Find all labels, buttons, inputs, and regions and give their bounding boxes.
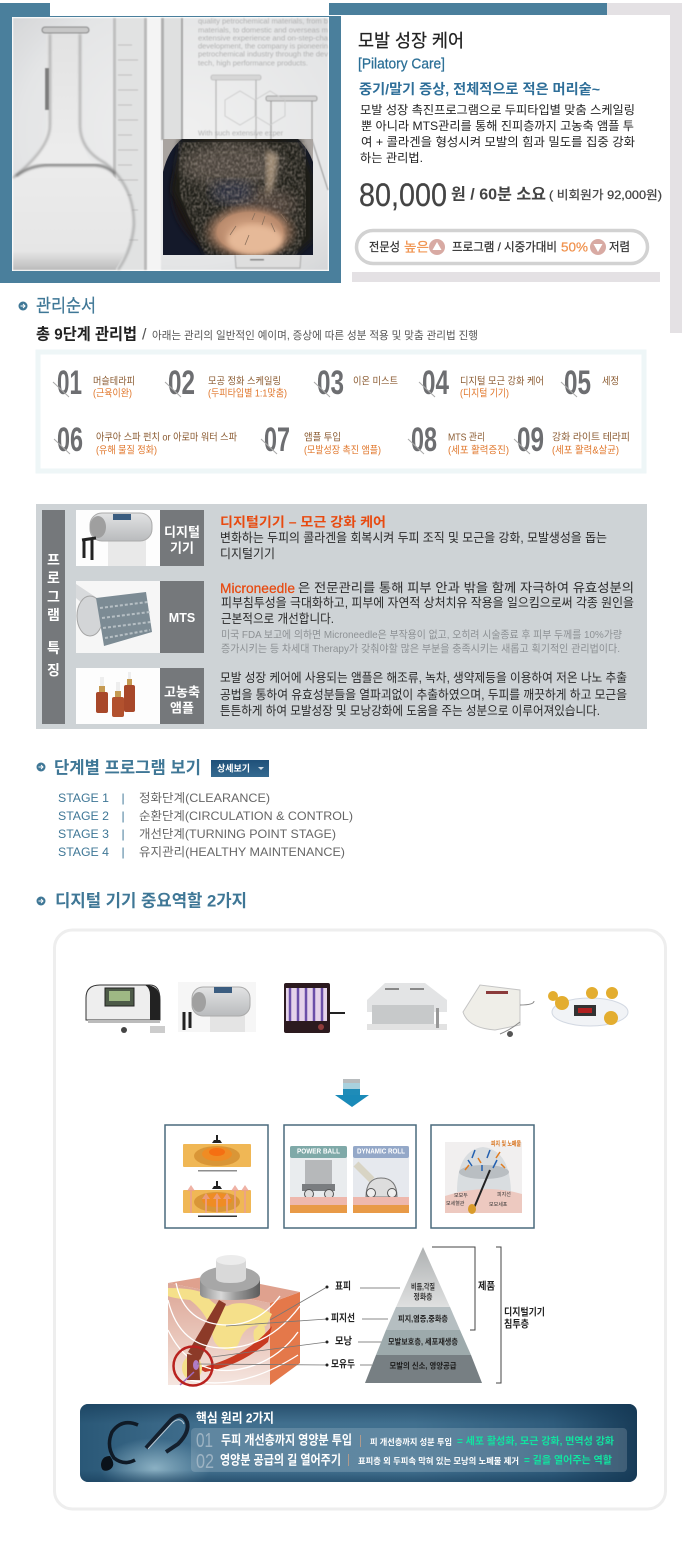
panel: product summary: [Pilatory Care]: [358, 56, 445, 72]
text: digital device description: [220, 514, 607, 561]
text block: stage list: STAGE 4: [58, 845, 109, 859]
diagram: sebum extraction: 모세혈관: [446, 1200, 465, 1207]
callout: expertise and price pill: 높은: [404, 240, 429, 254]
heading: program by stage: 단계별 프로그램 보기: [54, 758, 201, 778]
label: MTS: [160, 581, 204, 653]
subheading: 9 steps: [36, 326, 478, 344]
step 02: (두피타입별 1:1맞춤): [208, 386, 287, 400]
step 07: [261, 421, 381, 459]
step 06: (유해 물질 정화): [96, 444, 157, 456]
panel: nine treatment steps: [38, 352, 644, 471]
step 06: 06: [57, 421, 83, 459]
sidebar label: 특: [47, 640, 60, 656]
step 08: MTS 관리: [448, 432, 485, 444]
step 06: [54, 421, 237, 459]
text: MTS description: 미국 FDA 보고에 의하면 Microneedle은 부작용이 없고, 오히려 시술종료 후 피부 두께를 10%가량: [221, 628, 622, 641]
text block: stage list: |: [121, 809, 125, 823]
text: ampoule description: 공법을 통하여 유효성분들을 열파괴없이 추출하였으며, 두피를 깨끗하게 하고 모근을: [220, 688, 627, 702]
icon: device 5: [463, 985, 534, 1037]
step 01: (근육이완): [93, 388, 132, 400]
step 03: [314, 364, 398, 402]
step 03: 03: [317, 364, 344, 402]
button: details: 상세보기: [217, 762, 250, 774]
label: concentrated ampoule: 앰플: [170, 700, 194, 716]
diagram: sebum extraction: [431, 1125, 534, 1228]
label: digital device: 기기: [170, 540, 194, 556]
chart: penetration pyramid: 모발의 신소, 영양공급: [390, 1360, 457, 1370]
bracket: digital device range: [496, 1247, 545, 1383]
label: concentrated ampoule: [160, 668, 204, 724]
step 01: [53, 364, 135, 402]
subheading: 9 steps: 총 9단계 관리법: [36, 326, 137, 344]
icon: MTS roller photo: [76, 581, 160, 653]
header blue background: [0, 3, 682, 333]
subheading: 9 steps: /: [142, 326, 147, 344]
chart: penetration pyramid: [365, 1247, 482, 1383]
callout: expertise and price pill: 프로그램 / 시중가대비: [452, 240, 557, 254]
sidebar label: [42, 510, 65, 724]
text block: stage list: STAGE 2: [58, 809, 109, 823]
text block: stage list: STAGE 3: [58, 827, 109, 841]
heading: 관리순서: 관리순서: [36, 296, 96, 316]
callout: expertise and price pill: 저렴: [609, 240, 630, 254]
callout: two core principles: 02: [196, 1451, 214, 1473]
arrow: down: [335, 1079, 369, 1107]
callout: two core principles: 01: [196, 1430, 213, 1452]
diagram: sebum extraction: 모모세포: [489, 1201, 508, 1208]
bracket: digital device range: 디지털기기: [504, 1306, 545, 1318]
diagram: sebum extraction: 모모두: [454, 1193, 468, 1199]
callout: two core principles: 핵심 원리 2가지: [196, 1410, 274, 1426]
step 04: 디지털 모근 강화 케어: [460, 376, 544, 388]
text: MTS description: 은 전문관리를 통해 피부 안과 밖을 함께 자극하여 유효성분의: [298, 581, 634, 595]
icon: device 4: [367, 983, 447, 1030]
labels: scalp layers: 표피: [335, 1280, 351, 1292]
text: MTS description: 근본적으로 개선합니다.: [221, 612, 334, 626]
photo: laboratory glassware: petrochemical industry through the dev: [198, 52, 329, 58]
icon: device 1: [86, 985, 165, 1033]
panel: product summary: 모발 성장 촉진프로그램으로 두피타입별 맞춤 스케일링: [360, 103, 635, 117]
step 08: 08: [411, 421, 437, 459]
callout: expertise and price pill: [356, 230, 648, 264]
sidebar label: 징: [47, 662, 60, 678]
text block: stage list: |: [121, 827, 125, 841]
step 07: 07: [264, 421, 290, 459]
step 09: (세포 활력&살균): [552, 444, 619, 456]
text block: stage list: 개선단계(TURNING POINT STAGE): [139, 827, 336, 841]
icon: device 6: [548, 987, 628, 1026]
panel: program features: [36, 504, 647, 729]
step 04: [419, 364, 544, 402]
step 07: (모발성장 촉진 앰플): [304, 444, 381, 456]
icon: hook and lock: [101, 1415, 188, 1471]
callout: two core principles: 영양분 공급의 길 열어주기: [220, 1452, 341, 1468]
step 07: 앰플 투입: [304, 430, 341, 444]
step 02: [165, 364, 287, 402]
labels: scalp layers: 피지선: [331, 1312, 355, 1324]
step 09: 09: [517, 421, 544, 459]
sidebar label: 그: [47, 589, 60, 605]
text block: stage list: 순환단계(CIRCULATION & CONTROL): [139, 809, 353, 823]
sidebar label: 램: [47, 607, 60, 623]
step 01: 01: [57, 364, 82, 402]
callout: two core principles: 표피층 외 두피속 막혀 있는 모낭의 노폐물 제거: [358, 1456, 519, 1466]
button: details: [211, 760, 269, 777]
text: MTS description: 증가시키는 등 차세대 Therapy가 갖춰야할 많은 부분을 충족시키는 새롭고 획기적인 관리법이다.: [221, 642, 620, 655]
chart: penetration pyramid: 모발보호층, 세포재생층: [388, 1336, 459, 1346]
callout: two core principles: 피 개선층까지 성분 투입: [370, 1437, 452, 1447]
photo: thinning crown of hair: [163, 126, 313, 262]
panel: product summary: 하는 관리법.: [360, 151, 423, 165]
text: MTS description: Microneedle: [220, 580, 295, 596]
callout: two core principles: = 길을 열어주는 역할: [524, 1454, 612, 1466]
sidebar label: 프: [47, 552, 60, 568]
bracket: digital device range: 침투층: [504, 1318, 529, 1330]
text: MTS description: 피부침투성을 극대화하고, 피부에 자연적 상처치유 작용을 일으킴으로써 각종 원인을: [221, 596, 634, 610]
text: digital device description: 디지털기기 – 모근 강화 케어: [220, 514, 386, 530]
photo: laboratory glassware: development, the company is pioneerin: [198, 44, 328, 50]
step 06: 아쿠아 스파 펀치 or 아로마 워터 스파: [96, 430, 237, 444]
icon: digital device photo: [76, 510, 160, 566]
text block: stage list: 정화단계(CLEARANCE): [139, 791, 270, 805]
chart: penetration pyramid: 정화층: [414, 1292, 433, 1302]
labels: scalp layers: 모낭: [335, 1334, 352, 1348]
label: digital device: 디지털: [164, 524, 200, 540]
diagram: power ball and dynamic roll: POWER BALL: [297, 1148, 341, 1156]
diagram: scalp cross-section: [168, 1255, 327, 1386]
text block: stage list: [58, 791, 353, 859]
panel: product summary: ( 비회원가 92,000원): [549, 188, 662, 202]
callout: two core principles: [80, 1404, 637, 1482]
callout: expertise and price pill: 전문성: [369, 240, 400, 254]
callout: two core principles: 두피 개선층까지 영양분 투입: [221, 1432, 352, 1448]
chart: penetration pyramid: 피지,염증,중화층: [398, 1314, 449, 1324]
step 04: (디지털 기기): [460, 388, 509, 400]
panel: digital device roles: [54, 930, 666, 1509]
diagram: sebum extraction: 피지 및 노폐물: [491, 1138, 521, 1148]
photo: laboratory glassware: tech, high performance products.: [198, 60, 308, 68]
callout: expertise and price pill: 50%: [561, 240, 588, 254]
label: digital device: [160, 510, 204, 566]
step 09: 강화 라이트 테라피: [552, 432, 630, 444]
icon: ampoule bottles photo: [76, 668, 160, 724]
diagram: power ball and dynamic roll: DYNAMIC ROLL: [357, 1148, 406, 1156]
bracket: product range: [432, 1247, 495, 1330]
diagram: heat layers: [165, 1125, 268, 1228]
label: MTS: MTS: [169, 611, 195, 625]
icon: device 3 light panel: [284, 983, 345, 1033]
title: 모발 성장 케어: [358, 31, 464, 51]
icon: device 2: [178, 982, 256, 1032]
text: ampoule description: [220, 670, 627, 718]
panel: product summary: 여 + 콜라겐을 형성시켜 모발의 힘과 밀도를 집중 강화: [361, 135, 635, 149]
panel: product summary: [358, 31, 662, 213]
photo: laboratory glassware: [12, 17, 329, 271]
diagram: power ball and dynamic roll: [284, 1125, 416, 1228]
text: ampoule description: 모발 성장 케어에 사용되는 앰플은 해조류, 녹차, 생약제등을 이용하여 저온 나노 추출: [220, 670, 627, 685]
step 02: 모공 정화 스케일링: [208, 376, 281, 388]
step 09: [514, 421, 630, 459]
step 01: 머슬테라피: [93, 376, 135, 388]
photo: laboratory glassware: quality petrochemical materials, from b: [198, 18, 328, 26]
panel: product summary: 80,000: [359, 177, 447, 213]
text block: stage list: |: [121, 791, 125, 805]
text block: stage list: STAGE 1: [58, 791, 109, 805]
panel: product summary: 중기/말기 증상, 전체적으로 적은 머리숱~: [359, 81, 600, 97]
heading: two roles of digital devices: 디지털 기기 중요역할 2가지: [55, 892, 247, 910]
step 08: (세포 활력증진): [448, 444, 509, 456]
text: digital device description: 디지털기기: [220, 547, 275, 561]
text: digital device description: 변화하는 두피의 콜라겐을 회복시켜 두피 조직 및 모근을 강화, 모발생성을 돕는: [220, 531, 607, 545]
sidebar label: 로: [47, 570, 60, 586]
step 04: 04: [422, 364, 449, 402]
subheading: 9 steps: 아래는 관리의 일반적인 예이며, 증상에 따른 성분 적용 및 맞춤 관리법 진행: [152, 328, 478, 342]
text block: stage list: 유지관리(HEALTHY MAINTENANCE): [139, 845, 345, 859]
text block: stage list: |: [121, 845, 125, 859]
text: ampoule description: 튼튼하게 하여 모발성장 및 모낭강화에 도움을 주는 성분으로 이루어져있습니다.: [220, 704, 600, 718]
chart: penetration pyramid: 비듬,각질: [411, 1282, 435, 1292]
bracket: product range: 제품: [478, 1280, 495, 1292]
step 02: 02: [168, 364, 195, 402]
text: MTS description: [220, 580, 634, 655]
diagram: sebum extraction: 피지선: [497, 1191, 511, 1198]
labels: scalp layers: 모유두: [331, 1358, 355, 1370]
step 05: [561, 364, 619, 402]
step 08: [408, 421, 509, 459]
photo: laboratory glassware: materials, to domestic and overseas m: [198, 28, 328, 34]
step 03: 이온 미스트: [353, 376, 398, 388]
callout: two core principles: = 세포 활성화, 모근 강화, 면역성 강화: [457, 1434, 614, 1448]
step 05: 05: [564, 364, 591, 402]
panel: product summary: 뿐 아니라 MTS관리를 통해 진피층까지 고농축 앰플 투: [361, 119, 634, 133]
photo: laboratory glassware: With such extensive exper: [198, 130, 284, 138]
step 05: 세정: [602, 376, 619, 388]
panel: product summary: 원 / 60분 소요: [451, 186, 546, 204]
photo: laboratory glassware: extensive experience and on-step-cha: [198, 36, 328, 42]
label: concentrated ampoule: 고농축: [164, 684, 200, 700]
labels: scalp layers: [326, 1280, 400, 1370]
